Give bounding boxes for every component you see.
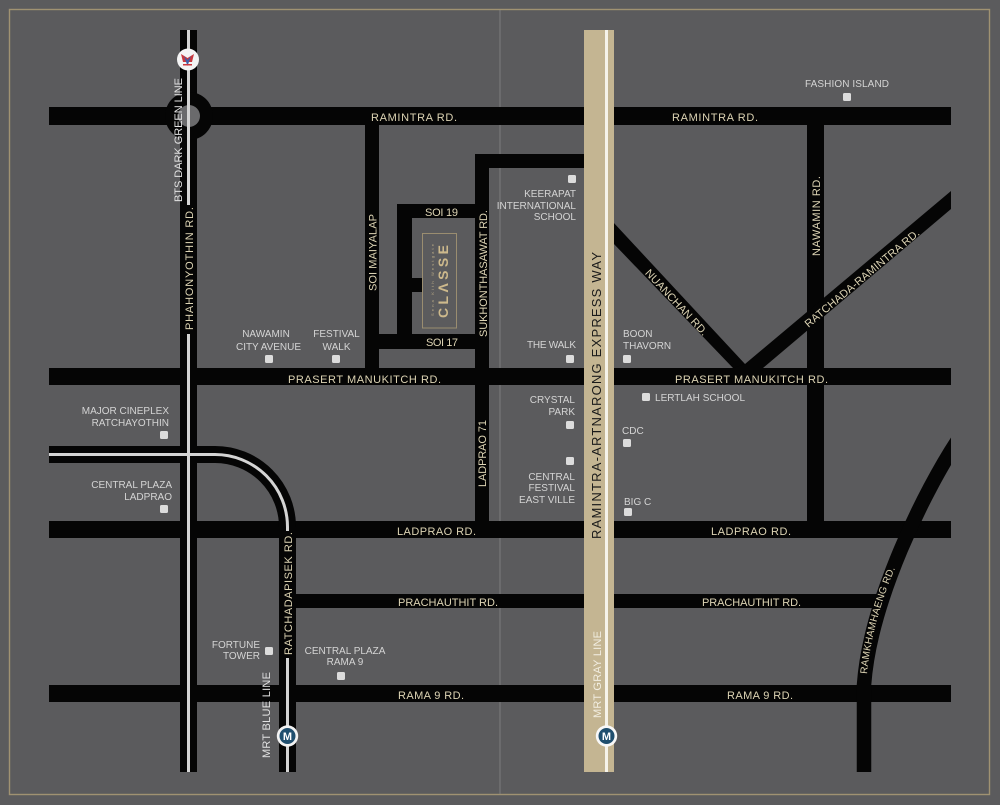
icon: MRT Blue Line station: M (283, 731, 292, 743)
icon: BTS station (177, 48, 199, 70)
label: Ladprao 71: LADPRAO 71 (477, 420, 489, 487)
MRT Blue Line stripe upper (49, 454, 288, 531)
label: Soi Maiyalap: SOI MAIYALAP (368, 214, 380, 291)
label: Nuanchan Rd: NUANCHAN RD. (642, 267, 710, 338)
POI: Keerapat International School: KEERAPAT (524, 189, 576, 200)
road: Phahonyothin Rd (180, 30, 197, 772)
POI: Lertlah School: LERTLAH SCHOOL (655, 393, 745, 404)
POI: Central Plaza Rama 9 (305, 646, 386, 680)
POI: Fashion Island (805, 79, 889, 101)
expressway white stripe (605, 30, 608, 772)
label: Phahonyothin Rd: PHAHONYOTHIN RD. (184, 207, 196, 330)
POI: Fashion Island: FASHION ISLAND (805, 79, 889, 90)
POI: Central Festival East Ville: EAST VILLE (519, 495, 575, 506)
POI: Big C (624, 497, 651, 516)
label: Nawamin Rd: NAWAMIN RD. (811, 176, 823, 256)
MRT Blue Line stripe lower (286, 658, 289, 772)
road: Ladprao Rd (49, 521, 951, 538)
road: Nuanchan Rd (613, 222, 763, 368)
POI: Nawamin City Avenue: CITY AVENUE (236, 342, 301, 353)
roundabout (165, 92, 213, 140)
road: Prachauthit Rd (290, 594, 880, 608)
POI: Nawamin City Avenue: NAWAMIN (242, 329, 290, 340)
points of interest (82, 79, 889, 680)
POI: Central Festival East Ville: FESTIVAL (528, 483, 575, 494)
POI: Festival Walk: FESTIVAL (313, 329, 360, 340)
road: Soi 19 and Soi 17 loop (379, 204, 475, 349)
POI: Boon Thavorn: BOON (623, 329, 652, 340)
label: MRT Blue Line: MRT BLUE LINE (261, 672, 273, 758)
POI: Major Cineplex Ratchayothin: MAJOR CINEPLEX (82, 406, 169, 417)
label: Rama 9 Rd east: RAMA 9 RD. (727, 690, 793, 702)
POI: Central Plaza Ladprao (91, 480, 172, 513)
POI: Central Plaza Rama 9: CENTRAL PLAZA (305, 646, 386, 657)
POI: The Walk: THE WALK (527, 340, 576, 351)
POI: Boon Thavorn (623, 329, 671, 363)
POI: Central Festival East Ville: CENTRAL (528, 472, 575, 483)
POI: Festival Walk (313, 329, 360, 363)
POI: Crystal Park: PARK (548, 407, 575, 418)
road: Ramintra Rd (49, 107, 951, 125)
label: Ramintra Rd east: RAMINTRA RD. (672, 112, 758, 124)
label: Ladprao Rd east: LADPRAO RD. (711, 526, 791, 538)
POI: Central Plaza Ladprao: LADPRAO (124, 492, 172, 503)
label: BTS Dark Green Line: BTS DARK GREEN LINE (173, 78, 185, 202)
POI: Major Cineplex Ratchayothin (82, 406, 169, 439)
project logo: CLASSE: CLΛSSE (435, 245, 451, 318)
icon: MRT Gray Line station (596, 725, 617, 747)
POI: Keerapat International School: INTERNATIONAL (497, 201, 576, 212)
label: Ratchadapisek Rd: RATCHADAPISEK RD. (283, 532, 295, 655)
road: Ramkhamhaeng Rd (864, 440, 958, 772)
icon: MRT Gray Line station: M (602, 731, 611, 743)
POI: Central Plaza Ladprao: CENTRAL PLAZA (91, 480, 172, 491)
POI: Fortune Tower: TOWER (223, 651, 260, 662)
label: MRT Gray Line: MRT GRAY LINE (592, 631, 604, 718)
BTS line stripe lower (187, 334, 190, 772)
project logo: CLASSE: Sena Kith Westgate (430, 243, 435, 316)
POI: Boon Thavorn: THAVORN (623, 341, 671, 352)
label: Ramkhamhaeng Rd: RAMKHAMHAENG RD. (860, 568, 895, 674)
POI: CDC: CDC (622, 426, 644, 437)
POI: Central Festival East Ville (519, 457, 575, 506)
POI: Big C: BIG C (624, 497, 651, 508)
POI: Fortune Tower (212, 640, 273, 662)
label: Soi 17: SOI 17 (426, 337, 458, 349)
POI: Nawamin City Avenue (236, 329, 301, 363)
POI: Crystal Park: CRYSTAL (530, 395, 575, 406)
expressway band (584, 30, 614, 772)
road: Prasert Manukitch Rd (49, 368, 951, 385)
road: Nawamin Rd (807, 125, 824, 521)
road: Soi Maiyalap (365, 125, 379, 368)
label: Prachauthit Rd west: PRACHAUTHIT RD. (398, 597, 498, 609)
label: Ladprao Rd west: LADPRAO RD. (397, 526, 476, 538)
project logo: CLASSE (422, 234, 456, 328)
POI: Keerapat International School (497, 175, 576, 223)
road: Ratchadapisek black band (49, 454, 288, 772)
road: Sukhonthasawat Rd (475, 154, 585, 521)
POI: Major Cineplex Ratchayothin: RATCHAYOTHIN (92, 418, 169, 429)
label: Rama 9 Rd west: RAMA 9 RD. (398, 690, 464, 702)
label: Sukhonthasawat Rd: SUKHONTHASAWAT RD. (478, 210, 490, 337)
label: Prasert Manukitch Rd east: PRASERT MANUKITCH RD. (675, 374, 828, 386)
label: expressway name: RAMINTRA-ARTNARONG EXPRESS WAY (589, 252, 604, 539)
label: Prachauthit Rd east: PRACHAUTHIT RD. (702, 597, 801, 609)
label: Ratchada-Ramintra Rd: RATCHADA-RAMINTRA RD. (803, 227, 922, 330)
road: Ratchada-Ramintra Rd (733, 191, 951, 368)
POI: The Walk (527, 340, 576, 363)
label: Ramintra Rd west: RAMINTRA RD. (371, 112, 457, 124)
icon: MRT Blue Line station (277, 725, 298, 747)
road labels (184, 112, 922, 702)
label: Prasert Manukitch Rd west: PRASERT MANUKITCH RD. (288, 374, 441, 386)
POI: Central Plaza Rama 9: RAMA 9 (327, 657, 364, 668)
BTS line stripe upper (187, 30, 190, 205)
POI: Festival Walk: WALK (323, 342, 351, 353)
road network (49, 107, 951, 702)
POI: Keerapat International School: SCHOOL (534, 212, 576, 223)
label: Soi 19: SOI 19 (425, 207, 458, 219)
POI: Crystal Park (530, 395, 575, 429)
POI: Fortune Tower: FORTUNE (212, 640, 260, 651)
road: Rama 9 Rd (49, 685, 951, 702)
POI: CDC (622, 426, 644, 447)
